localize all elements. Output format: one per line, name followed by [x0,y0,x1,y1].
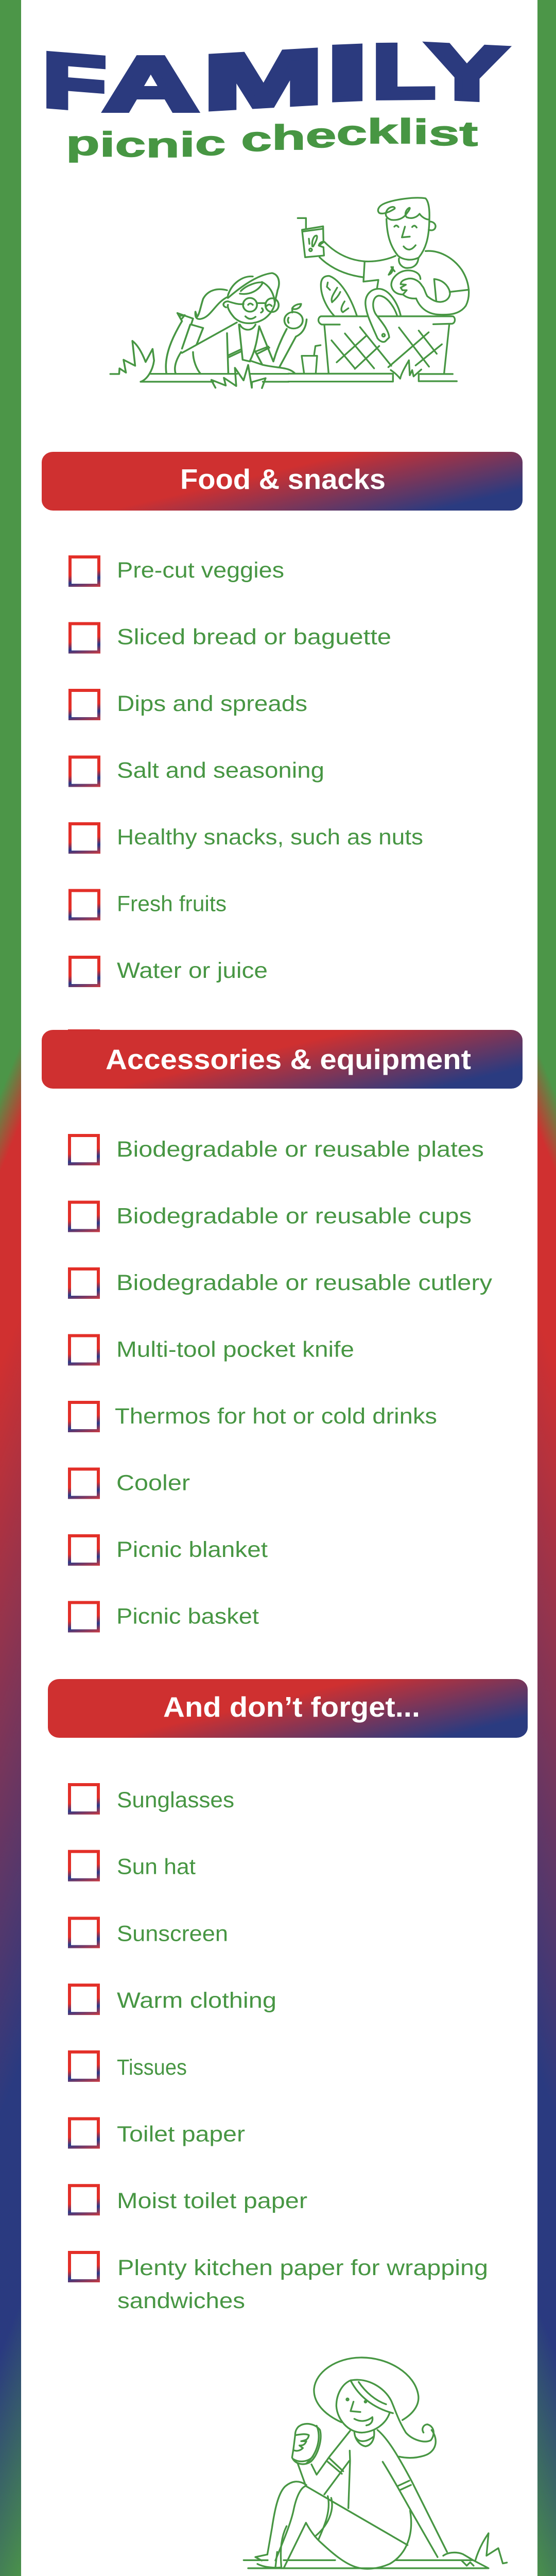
item: Tissues: Tissues [117,2055,187,2080]
checklist: food and snacks [70,557,423,986]
header: And don't forget [48,1679,528,1738]
item: plates [70,1136,484,1164]
item: Sliced bread or baguette [70,623,391,652]
item: Warm clothing: Warm clothing [117,1988,276,2013]
item: Healthy snacks: Healthy snacks, such as nuts [117,825,423,850]
header: And don't forget: And don’t forget... [163,1691,420,1723]
title: FAMILY: L [373,29,435,114]
checklist: accessories and equipment [70,1136,493,1631]
item: Sun hat: Sun hat [117,1855,196,1879]
item: Plenty kitchen paper: sandwiches [117,2289,245,2313]
item: Toilet paper: Toilet paper [117,2122,245,2146]
title: FAMILY [43,28,507,127]
item: Tissues [70,2052,187,2080]
title: FAMILY: A [104,41,198,127]
item: Multi-tool pocket knife [70,1335,354,1364]
item: Salt and seasoning [70,757,324,785]
title: FAMILY: Y [427,28,507,117]
item: Pre-cut veggies [70,557,284,585]
item: Picnic blanket [70,1536,268,1564]
item: Picnic basket [70,1602,259,1631]
title: FAMILY: I [327,30,367,116]
item: Cooler [70,1469,190,1497]
title: FAMILY: F [43,37,106,127]
item: Sliced bread or baguette: Sliced bread or baguette [117,624,391,649]
item: Sunglasses: Sunglasses [117,1788,234,1812]
item: Sunscreen [70,1918,228,1946]
checklist: and don't forget [70,1785,488,2313]
item: Water or juice [70,957,268,986]
item: Pre-cut veggies: Pre-cut veggies [117,558,284,583]
item: Sunglasses [70,1785,234,1813]
item: Dips and spreads [70,690,307,719]
item: Thermos [70,1402,437,1431]
item: Sunscreen: Sunscreen [117,1921,228,1946]
item: Fresh fruits [70,890,227,919]
item: Dips and spreads: Dips and spreads [117,691,307,716]
item: Sun hat [70,1852,196,1880]
item: Plenty kitchen paper [70,2252,488,2313]
item: Warm clothing [70,1985,276,2013]
item: Moist toilet paper [70,2185,307,2214]
title: FAMILY: M [204,33,323,126]
item: Fresh fruits: Fresh fruits [117,891,227,916]
header: Food & snacks [42,452,523,511]
item: Picnic basket: Picnic basket [116,1604,259,1629]
subtitle: picnic checklist: picnic checklist [66,112,478,165]
illustration: girl with apple [110,273,307,388]
illustration: woman in sun hat with sandwich [244,2358,507,2569]
item: cutlery [70,1269,493,1297]
item: Moist toilet paper: Moist toilet paper [117,2189,307,2213]
item: plates: Biodegradable or reusable plates [116,1137,484,1162]
right gradient side band [537,0,556,2576]
item: Salt and seasoning: Salt and seasoning [117,758,324,783]
illustration: man with juice, baguette and basket [288,198,469,382]
left gradient side band [0,0,21,2576]
item: cutlery: Biodegradable or reusable cutlery [116,1270,493,1295]
header: Accessories & equipment: Accessories & equipment [106,1043,471,1075]
item: Cooler: Cooler [116,1470,190,1495]
item: cups: Biodegradable or reusable cups [116,1204,472,1228]
item: Water or juice: Water or juice [117,958,268,983]
header: Accessories & equipment [42,1030,523,1089]
item: Thermos: Thermos for hot or cold drinks [115,1404,437,1429]
item: Picnic blanket: Picnic blanket [116,1537,268,1562]
item: Toilet paper [70,2119,245,2147]
item: cups [70,1202,472,1230]
item: Multi-tool pocket knife: Multi-tool pocket knife [116,1337,354,1362]
header: Food & snacks: Food & snacks [180,463,386,495]
item: Plenty kitchen paper: Plenty kitchen paper for wrapping [117,2256,488,2280]
